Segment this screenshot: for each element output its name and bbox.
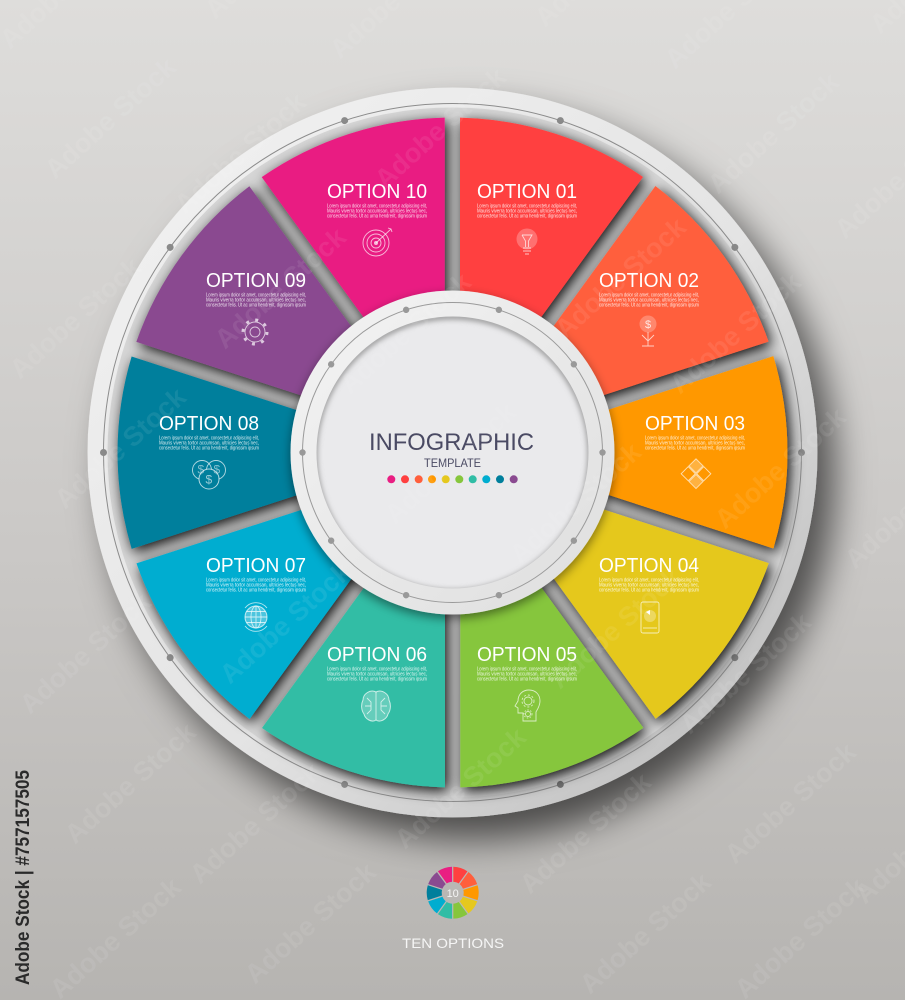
option 03 text and icon	[645, 413, 745, 489]
watermarks: Adobe Stock	[379, 396, 522, 529]
icon: puzzle	[681, 459, 711, 489]
body text: consectetur felis. Ut ac urna hendrerit, dignissim ipsum	[206, 588, 306, 594]
heading: OPTION 05	[477, 644, 577, 666]
option 05 text and icon	[477, 644, 577, 721]
watermarks: Adobe Stock	[514, 766, 657, 899]
body text: consectetur felis. Ut ac urna hendrerit, dignissim ipsum	[599, 588, 699, 594]
watermarks: Adobe Stock	[209, 221, 352, 354]
body text	[327, 204, 427, 220]
body text: consectetur felis. Ut ac urna hendrerit, dignissim ipsum	[477, 214, 577, 220]
option 04 text and icon	[599, 555, 699, 633]
segment 08	[75, 279, 428, 549]
icon: coins: $	[206, 472, 212, 486]
body text: Lorem ipsum dolor sit amet, consectetur adipiscing elit,	[327, 666, 427, 672]
watermarks: Adobe Stock	[674, 606, 817, 739]
icon: money plant: $	[645, 319, 651, 331]
body text: consectetur felis. Ut ac urna hendrerit, dignissim ipsum	[477, 676, 577, 682]
body text: Lorem ipsum dolor sit amet, consectetur adipiscing elit,	[477, 204, 577, 210]
body text: Mauris viverra tortor accumsan, ultricies lectus nec,	[206, 298, 306, 304]
option 07 text and icon	[206, 555, 306, 631]
body text: consectetur felis. Ut ac urna hendrerit, dignissim ipsum	[327, 214, 427, 220]
body text	[477, 204, 577, 220]
watermarks: Adobe Stock	[14, 586, 157, 719]
body text: Mauris viverra tortor accumsan, ultricies lectus nec,	[206, 582, 306, 588]
body text	[599, 578, 699, 594]
body text: consectetur felis. Ut ac urna hendrerit, dignissim ipsum	[599, 302, 699, 308]
heading: OPTION 01	[477, 181, 577, 203]
icon: coins	[192, 460, 226, 489]
heading: OPTION 09	[206, 270, 306, 292]
icon: globe	[245, 603, 267, 631]
icon: coins: $	[198, 462, 204, 476]
option 09 text and icon	[206, 270, 306, 344]
body text	[599, 292, 699, 308]
heading: OPTION 02	[599, 270, 699, 292]
watermarks: Adobe Stock	[214, 556, 357, 689]
body text	[206, 578, 306, 594]
heading: OPTION 03	[645, 413, 745, 435]
body text: Lorem ipsum dolor sit amet, consectetur adipiscing elit,	[599, 578, 699, 584]
body text: consectetur felis. Ut ac urna hendrerit, dignissim ipsum	[327, 676, 427, 682]
segment 10	[262, 70, 593, 429]
body text	[477, 666, 577, 682]
icon: gear	[243, 320, 267, 344]
option 01 text and icon	[477, 181, 577, 254]
body text: Mauris viverra tortor accumsan, ultricies lectus nec,	[477, 208, 577, 214]
subtitle: TEMPLATE	[424, 456, 481, 470]
heading: OPTION 10	[327, 181, 427, 203]
watermarks: Adobe Stock	[664, 266, 807, 399]
option 02 text and icon	[599, 270, 699, 346]
hub inner disc	[316, 316, 588, 588]
watermarks: Adobe Stock	[369, 61, 512, 194]
watermarks: Adobe Stock	[169, 86, 312, 219]
segment 06	[262, 476, 445, 787]
body text: Lorem ipsum dolor sit amet, consectetur adipiscing elit,	[327, 204, 427, 210]
watermarks: Adobe Stock	[4, 251, 147, 384]
watermarks: Adobe Stock	[49, 381, 192, 514]
hub rim	[290, 290, 614, 614]
icon: head with gears	[515, 690, 540, 721]
watermarks: Adobe Stock	[239, 856, 382, 989]
option 10 text and icon	[327, 181, 427, 256]
icon: brain	[362, 691, 390, 721]
body text: consectetur felis. Ut ac urna hendrerit, dignissim ipsum	[206, 302, 306, 308]
body text: Mauris viverra tortor accumsan, ultricies lectus nec,	[159, 440, 259, 446]
icon: smartphone	[641, 602, 659, 633]
body text: Mauris viverra tortor accumsan, ultricies lectus nec,	[327, 672, 427, 678]
stock id side label: Adobe Stock | #757157505	[13, 770, 34, 985]
body text: Lorem ipsum dolor sit amet, consectetur adipiscing elit,	[206, 578, 306, 584]
outer ring of the wheel	[88, 88, 818, 818]
body text: consectetur felis. Ut ac urna hendrerit, dignissim ipsum	[159, 446, 259, 452]
body text: Lorem ipsum dolor sit amet, consectetur adipiscing elit,	[599, 292, 699, 298]
option 06 text and icon	[327, 644, 427, 721]
body text: Mauris viverra tortor accumsan, ultricies lectus nec,	[477, 672, 577, 678]
watermarks: Adobe Stock	[544, 561, 687, 694]
body text: Mauris viverra tortor accumsan, ultricies lectus nec,	[599, 298, 699, 304]
watermarks: Adobe Stock	[719, 736, 862, 869]
heading: OPTION 07	[206, 555, 306, 577]
body text	[327, 666, 427, 682]
body text: Lorem ipsum dolor sit amet, consectetur adipiscing elit,	[159, 436, 259, 442]
mini donut icon	[423, 863, 482, 922]
watermarks: Adobe Stock	[709, 401, 852, 534]
watermarks: Adobe Stock	[702, 66, 845, 199]
wheel segments	[75, 70, 830, 835]
body text: Mauris viverra tortor accumsan, ultricies lectus nec,	[327, 208, 427, 214]
segment 01	[460, 118, 643, 429]
central hub	[290, 290, 614, 614]
watermarks: Adobe Stock	[39, 51, 182, 184]
segment 07	[102, 360, 433, 719]
mini donut icon: 10	[447, 888, 459, 900]
segment 09	[136, 168, 489, 438]
option 08 text and icon	[159, 413, 259, 489]
watermarks: Adobe Stock	[184, 756, 327, 889]
watermarks: Adobe Stock	[389, 721, 532, 854]
body text: consectetur felis. Ut ac urna hendrerit, dignissim ipsum	[645, 446, 745, 452]
body text: Lorem ipsum dolor sit amet, consectetur adipiscing elit,	[206, 292, 306, 298]
body text	[645, 436, 745, 452]
icon: light bulb	[516, 228, 538, 254]
icon: target	[363, 228, 392, 256]
watermarks: Adobe Stock	[334, 266, 477, 399]
watermarks: Adobe Stock	[549, 211, 692, 344]
colour dots	[387, 475, 518, 483]
body text: Lorem ipsum dolor sit amet, consectetur adipiscing elit,	[645, 436, 745, 442]
segment 02	[472, 186, 803, 545]
title: INFOGRAPHIC	[369, 429, 534, 456]
watermarks: Adobe Stock	[504, 436, 647, 569]
body text: Mauris viverra tortor accumsan, ultricies lectus nec,	[645, 440, 745, 446]
segment 05	[312, 476, 643, 835]
watermarks: Adobe Stock	[574, 866, 717, 999]
heading: OPTION 08	[159, 413, 259, 435]
body text: Mauris viverra tortor accumsan, ultricies lectus nec,	[599, 582, 699, 588]
segment 04	[416, 467, 769, 737]
body text	[206, 292, 306, 308]
body text: Lorem ipsum dolor sit amet, consectetur adipiscing elit,	[477, 666, 577, 672]
icon: coins: $	[214, 462, 220, 476]
caption: TEN OPTIONS	[402, 935, 504, 951]
heading: OPTION 04	[599, 555, 699, 577]
watermarks: Adobe Stock	[59, 716, 202, 849]
heading: OPTION 06	[327, 644, 427, 666]
segment 03	[477, 356, 830, 626]
body text	[159, 436, 259, 452]
